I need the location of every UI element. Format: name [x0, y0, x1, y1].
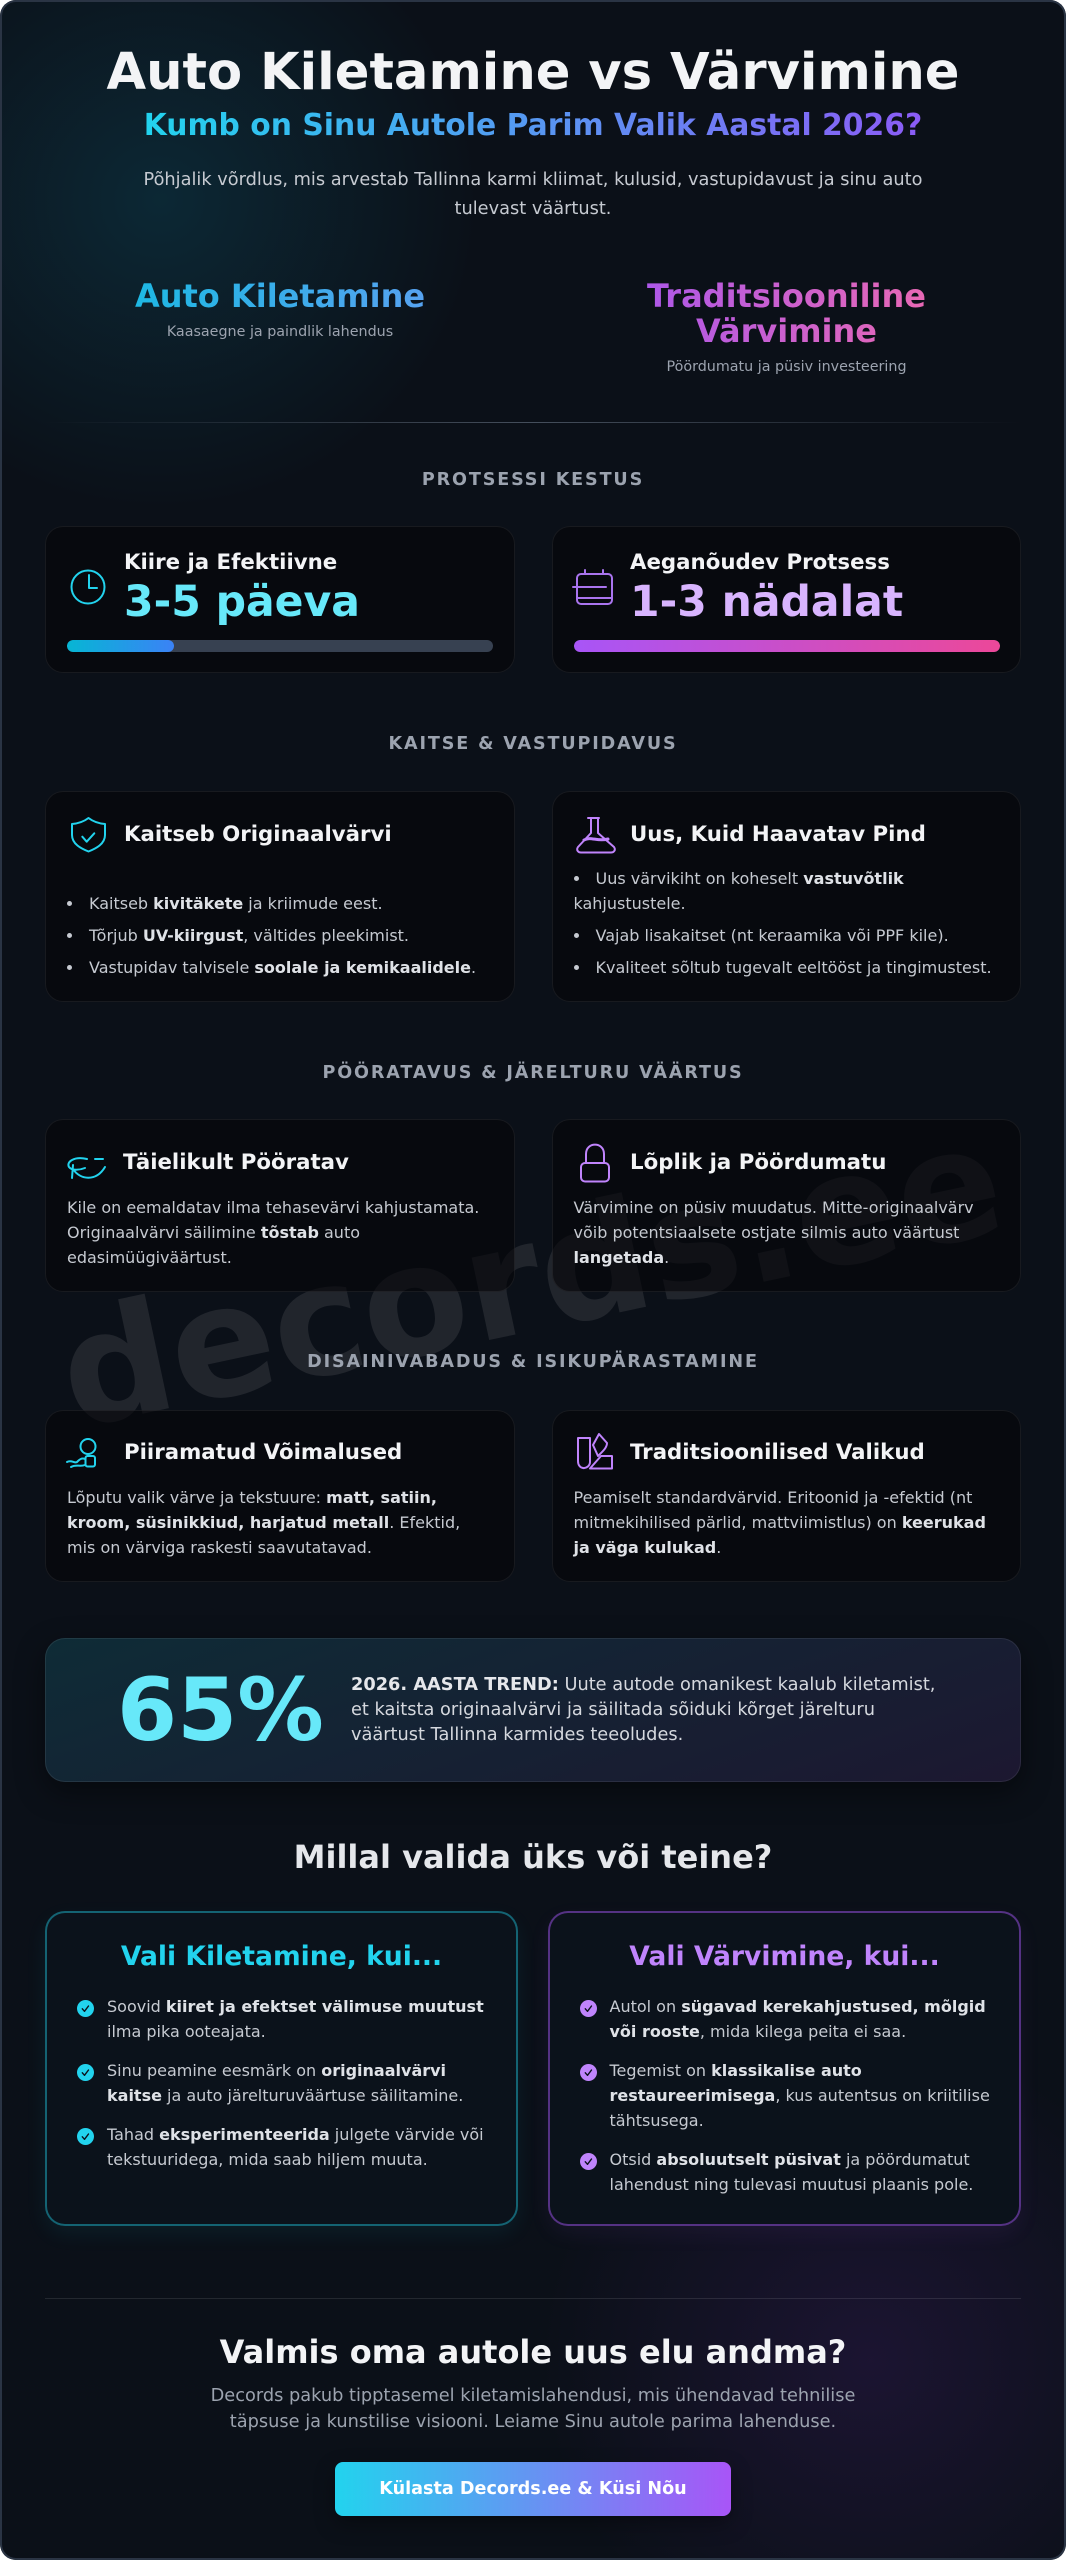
section label: process duration: PROTSESSI KESTUS: [422, 470, 644, 490]
section label: reversibility and resale value: PÖÖRATAVUS & JÄRELTURU VÄÄRTUS: [322, 1063, 743, 1083]
reason 2: tähtsusega.: [610, 2111, 704, 2130]
drawbacks list: kahjustustele.: [574, 894, 686, 913]
call to action text: täpsuse ja kunstilise visiooni. Leiame Sinu autole parima lahenduse.: [230, 2412, 836, 2432]
panel: unlimited possibilities: [45, 1410, 515, 1582]
column heading: Traditsiooniline Värvimine: [647, 277, 926, 375]
intro paragraph: [144, 170, 922, 219]
progress bar 100%: [574, 640, 1000, 652]
heading: Täielikult Pööratav: [123, 1150, 349, 1175]
panel: choose wrapping: [45, 1911, 518, 2226]
panel: protects original paint: [45, 791, 515, 1002]
section label: design freedom: DISAINIVABADUS & ISIKUPÄRASTAMINE: [307, 1352, 759, 1372]
icon: flask: [576, 817, 616, 854]
description: [67, 1198, 479, 1266]
heading text: [647, 279, 926, 349]
icon: calendar: [572, 569, 613, 605]
watermark: decords.ee: decords.ee: [44, 1090, 1018, 1465]
heading: Kaitseb Originaalvärvi: [124, 822, 392, 846]
panel: traditional choices: [552, 1410, 1021, 1582]
subtitle: Kumb on Sinu Autole Parim Valik Aastal 2026?: [144, 108, 922, 143]
heading: Uus, Kuid Haavatav Pind: [630, 822, 926, 846]
call to action text: Decords pakub tipptasemel kiletamislahendusi, mis ühendavad tehnilise: [211, 2386, 855, 2406]
description: [574, 1198, 974, 1266]
description: Peamiselt standardvärvid. Eritoonid ja -efektid (nt: [574, 1488, 972, 1506]
check icon 3: [77, 2128, 94, 2145]
drawbacks list: Uus värvikiht on koheselt vastuvõtlik: [596, 869, 904, 888]
reason 3: lahendust ning tulevasi muutusi plaanis pole.: [610, 2175, 973, 2194]
check icon 2: [77, 2064, 94, 2081]
description: [572, 1488, 986, 1556]
benefits list: Tõrjub UV-kiirgust, vältides pleekimist.: [89, 926, 409, 945]
reason 1: ilma pika ooteajata.: [107, 2022, 266, 2041]
heading: Vali Värvimine, kui...: [629, 1941, 940, 1972]
check icon 1: [580, 2000, 597, 2017]
duration value: 3-5 päeva: [124, 578, 360, 627]
heading: call to action: Valmis oma autole uus elu andma?: [220, 2333, 846, 2371]
reason 2: restaureerimisega, kus autentsus on kriitilise: [610, 2086, 990, 2105]
heading: Kiire ja Efektiivne: [124, 550, 337, 575]
description: ja väga kulukad.: [574, 1538, 721, 1556]
description: kroom, süsinikkiud, harjatud metall. Efektid,: [67, 1512, 460, 1532]
icon: clock: [70, 570, 106, 604]
panel: new but vulnerable surface: [552, 791, 1021, 1002]
panel: choose painting: [548, 1911, 1021, 2226]
benefits list: Kaitseb kivitäkete ja kriimude eest.: [89, 894, 383, 913]
description: Originaalvärvi säilimine tõstab auto: [67, 1222, 360, 1242]
description: langetada.: [574, 1248, 669, 1266]
reason 3: Tahad eksperimenteerida julgete värvide või: [107, 2125, 484, 2144]
reason 1: [107, 1997, 484, 2041]
drawbacks list: Kvaliteet sõltub tugevalt eeltööst ja tingimustest.: [596, 958, 992, 977]
reason 2: [609, 2061, 990, 2130]
icon: shield: [71, 817, 106, 852]
reason 1: [610, 1997, 986, 2041]
icon: palette shapes: [577, 1433, 613, 1470]
heading: Traditsioonilised Valikud: [630, 1440, 925, 1464]
icon: swatches: [66, 1438, 96, 1468]
heading: Piiramatud Võimalused: [124, 1440, 402, 1464]
reason 1: või rooste, mida kilega peita ei saa.: [610, 2022, 906, 2041]
column heading: Auto Kiletamine: [135, 277, 425, 340]
reason 2: [107, 2061, 463, 2105]
heading: Vali Kiletamine, kui...: [121, 1941, 442, 1972]
tagline: Kaasaegne ja paindlik lahendus: [167, 324, 393, 340]
reason 1: Soovid kiiret ja efektset välimuse muutust: [107, 1997, 484, 2016]
button: [335, 2462, 731, 2516]
panel: quick process: [45, 526, 515, 673]
trend text: et kaitsta originaalvärvi ja säilitada sõiduki kõrget järelturu: [351, 1700, 875, 1720]
reason 3: [610, 2150, 973, 2194]
stat number: 65%: [117, 1661, 324, 1761]
duration value: 1-3 nädalat: [630, 578, 903, 627]
panel: final and irreversible: [552, 1119, 1021, 1292]
icon: reversible arrows: [67, 1157, 106, 1179]
benefits list: [67, 894, 476, 977]
callout: 65% trend: [45, 1638, 1021, 1782]
heading text: Traditsiooniline: [647, 277, 926, 315]
section label: protection and durability: KAITSE & VASTUPIDAVUS: [389, 734, 677, 754]
button: Külasta Decords.ee & Küsi Nõu: [379, 2479, 687, 2499]
intro paragraph: tulevast väärtust.: [455, 199, 611, 219]
panel: slow process: [552, 526, 1021, 673]
reason 3: Otsid absoluutselt püsivat ja pöördumatut: [610, 2150, 970, 2169]
description: mis on värviga raskesti saavutatavad.: [67, 1538, 372, 1556]
reason 3: [106, 2125, 484, 2169]
reason 2: kaitse ja auto järelturuväärtuse säilitamine.: [107, 2086, 463, 2105]
heading: when to choose: Millal valida üks või teine?: [294, 1838, 772, 1876]
call to action text: [211, 2386, 855, 2432]
description: edasimüügiväärtust.: [67, 1248, 232, 1266]
description: Lõputu valik värve ja tekstuure: matt, satiin,: [67, 1488, 437, 1506]
tagline: Pöördumatu ja püsiv investeering: [666, 359, 907, 375]
description: mitmekihilised pärlid, mattviimistlus) on keerukad: [574, 1512, 986, 1532]
description: [67, 1488, 460, 1556]
heading: Lõplik ja Pöördumatu: [630, 1150, 886, 1175]
reason 2: Tegemist on klassikalise auto: [610, 2061, 862, 2080]
drawbacks list: Vajab lisakaitset (nt keraamika või PPF kile).: [596, 926, 949, 945]
intro paragraph: Põhjalik võrdlus, mis arvestab Tallinna karmi kliimat, kulusid, vastupidavust ja sinu auto: [144, 170, 922, 190]
reason 1: Autol on sügavad kerekahjustused, mõlgid: [610, 1997, 986, 2016]
heading text: Värvimine: [696, 312, 877, 350]
drawbacks list: [574, 869, 992, 977]
panel: fully reversible: [45, 1119, 515, 1292]
trend text: väärtust Tallinna karmides teeoludes.: [351, 1725, 683, 1745]
trend text: [351, 1675, 935, 1745]
check icon 3: [580, 2153, 597, 2170]
icon: lock: [580, 1144, 610, 1182]
progress bar 25%: [67, 640, 493, 652]
heading text: Auto Kiletamine: [135, 277, 425, 315]
description: Kile on eemaldatav ilma tehasevärvi kahjustamata.: [67, 1198, 479, 1216]
check icon 2: [580, 2064, 597, 2081]
description: Värvimine on püsiv muudatus. Mitte-originaalvärv: [574, 1198, 974, 1216]
description: võib potentsiaalsete ostjate silmis auto väärtust: [574, 1222, 959, 1242]
title: Auto Kiletamine vs Värvimine: [106, 42, 960, 102]
benefits list: Vastupidav talvisele soolale ja kemikaalidele.: [89, 958, 476, 977]
reason 2: Sinu peamine eesmärk on originaalvärvi: [107, 2061, 446, 2080]
trend text: 2026. AASTA TREND: Uute autode omanikest kaalub kiletamist,: [351, 1675, 935, 1695]
reason 3: tekstuuridega, mida saab hiljem muuta.: [107, 2150, 428, 2169]
check icon 1: [77, 2000, 94, 2017]
heading: Aeganõudev Protsess: [630, 550, 890, 575]
